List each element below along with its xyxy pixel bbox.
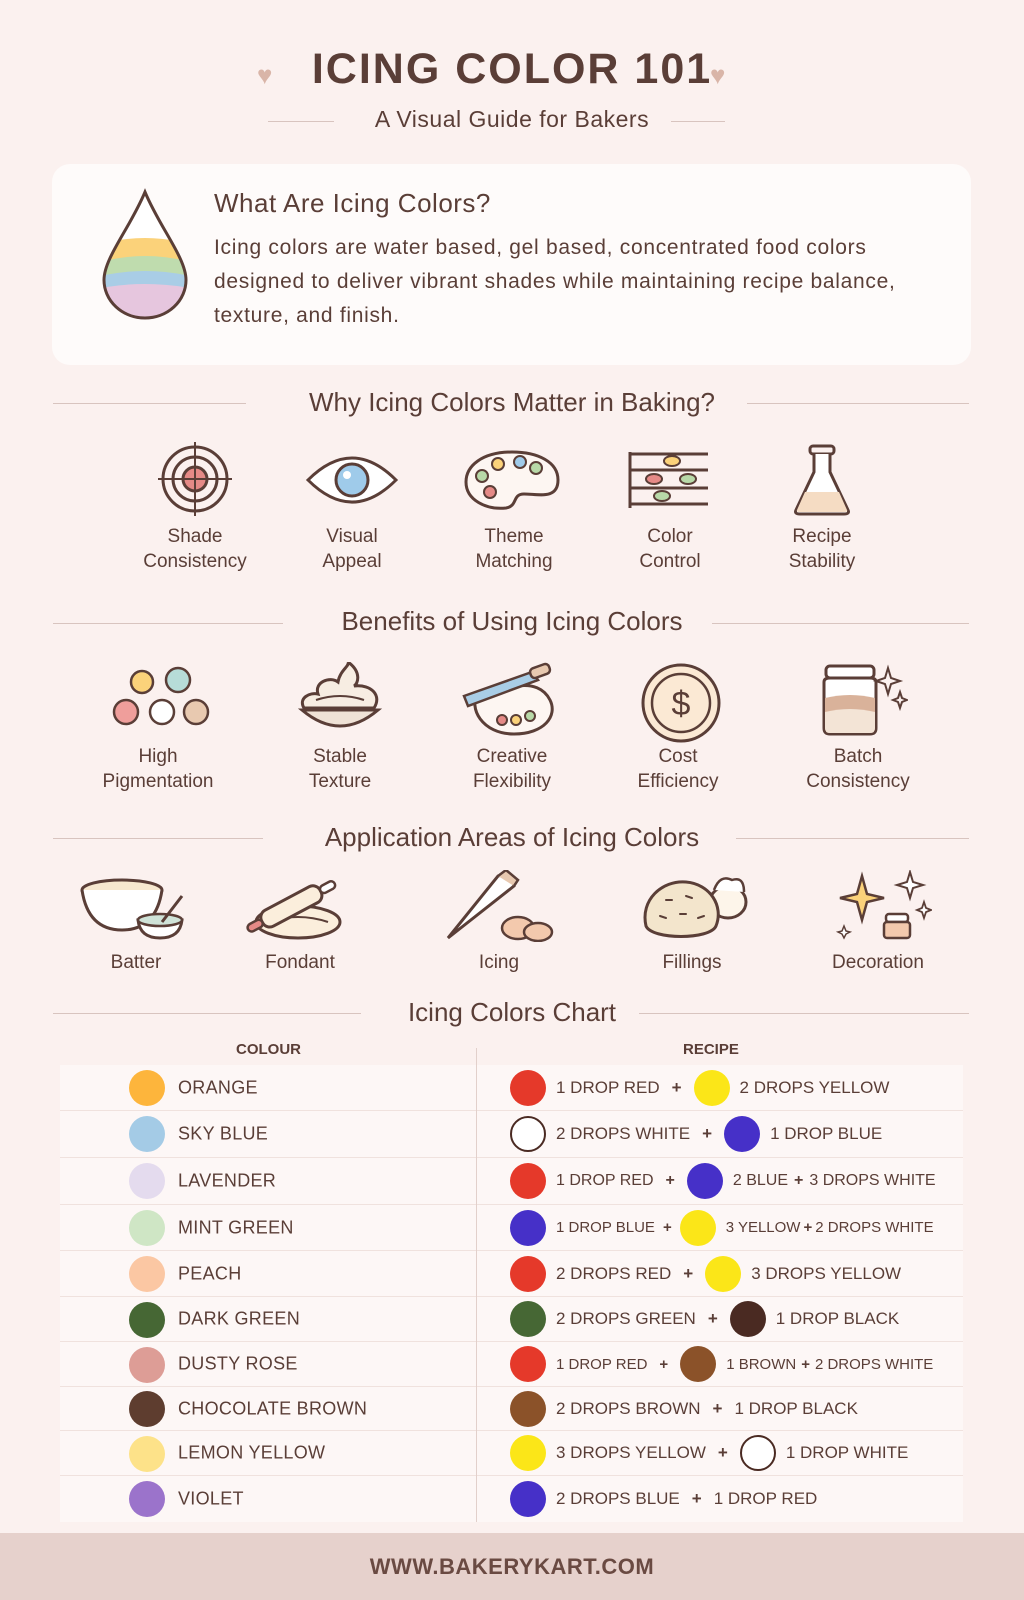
row: mint green bbox=[60, 1205, 963, 1251]
row: chocolate brown: CHOCOLATE BROWN bbox=[178, 1398, 367, 1418]
row: chocolate brown bbox=[60, 1387, 963, 1431]
row: dusty rose: 1 DROP RED 1 BROWN 2 DROPS WHITE bbox=[556, 1356, 933, 1372]
icon: palette bbox=[464, 450, 560, 510]
label: decoration: Decoration bbox=[832, 952, 924, 973]
icon: eye bbox=[306, 456, 398, 504]
label: theme matching bbox=[475, 526, 553, 572]
label: recipe stability: Recipe bbox=[792, 526, 852, 547]
label: visual appeal: Appeal bbox=[322, 551, 382, 572]
icon: coin: $ bbox=[672, 685, 691, 723]
icon: decoration stars bbox=[836, 870, 932, 940]
text block: designed to deliver vibrant shades while maintaining recipe balance, bbox=[214, 270, 896, 293]
row: peach bbox=[60, 1251, 963, 1297]
label: batch consistency: Consistency bbox=[806, 771, 910, 792]
row: dark green: 2 DROPS GREEN 1 DROP BLACK bbox=[556, 1309, 899, 1328]
footer: WWW.BAKERYKART.COM bbox=[370, 1554, 654, 1579]
row: sky blue: SKY BLUE bbox=[178, 1124, 268, 1144]
label: color control: Control bbox=[639, 551, 701, 572]
row: violet: VIOLET bbox=[178, 1488, 244, 1508]
icon: rainbow drop bbox=[102, 188, 188, 320]
label: icing: Icing bbox=[479, 952, 519, 973]
row: mint green: + bbox=[663, 1219, 672, 1236]
label: theme matching: Matching bbox=[475, 551, 553, 572]
label: stable texture bbox=[309, 746, 371, 792]
label: color control bbox=[639, 526, 701, 572]
row: sky blue: 2 DROPS WHITE 1 DROP BLUE bbox=[556, 1124, 882, 1143]
row: chocolate brown: + bbox=[713, 1398, 722, 1418]
row: mint green: + bbox=[803, 1219, 812, 1236]
label: batter: Batter bbox=[111, 952, 161, 973]
icon: flask bbox=[794, 444, 850, 516]
label: shade consistency: Consistency bbox=[143, 551, 247, 572]
label: shade consistency: Shade bbox=[168, 526, 222, 547]
icon: cream bowl bbox=[298, 662, 382, 728]
label: high pigmentation: High bbox=[138, 746, 178, 767]
title: ICING COLOR 101 bbox=[312, 45, 712, 93]
row: lavender: + bbox=[794, 1172, 803, 1189]
label: creative flexibility: Creative bbox=[477, 746, 547, 767]
label: visual appeal bbox=[322, 526, 382, 572]
row: orange: + bbox=[672, 1078, 682, 1096]
label: stable texture: Stable bbox=[313, 746, 367, 767]
row: orange bbox=[60, 1065, 963, 1111]
label: color control: Color bbox=[647, 526, 693, 547]
label: stable texture: Texture bbox=[309, 771, 371, 792]
text block: Icing colors are water based, gel based, concentrated food colors bbox=[214, 236, 867, 259]
row: lemon yellow: LEMON YELLOW bbox=[178, 1442, 325, 1462]
icon: batter bowl bbox=[80, 878, 184, 940]
row: chocolate brown: 2 DROPS BROWN 1 DROP BLACK bbox=[556, 1398, 858, 1418]
header: colour: COLOUR bbox=[236, 1041, 301, 1058]
heading: chart: Icing Colors Chart bbox=[408, 997, 616, 1027]
label: theme matching: Theme bbox=[484, 526, 544, 547]
label: fondant: Fondant bbox=[265, 952, 335, 973]
row: lavender bbox=[60, 1158, 963, 1205]
row: lemon yellow: 3 DROPS YELLOW 1 DROP WHITE bbox=[556, 1443, 908, 1462]
row: lavender: + bbox=[666, 1172, 675, 1189]
icon: coin bbox=[642, 664, 720, 742]
row: dusty rose: + bbox=[659, 1356, 668, 1372]
header: recipe: RECIPE bbox=[683, 1041, 739, 1058]
icon: fondant rolling pin bbox=[246, 880, 342, 940]
label: shade consistency bbox=[143, 526, 247, 572]
row: dark green: + bbox=[708, 1309, 718, 1328]
text block: texture, and finish. bbox=[214, 304, 400, 327]
row: violet: + bbox=[692, 1489, 702, 1508]
row: sky blue: + bbox=[702, 1124, 712, 1143]
heading: application: Application Areas of Icing Colors bbox=[325, 822, 699, 852]
icon: heart left: ♥ bbox=[257, 60, 272, 90]
text block bbox=[214, 236, 896, 327]
label: cost efficiency: Efficiency bbox=[638, 771, 718, 792]
heading: What Are Icing Colors? bbox=[214, 188, 491, 218]
label: recipe stability: Stability bbox=[789, 551, 855, 572]
row: violet: 2 DROPS BLUE 1 DROP RED bbox=[556, 1489, 817, 1508]
icon: heart right: ♥ bbox=[710, 60, 725, 90]
footer bbox=[0, 1533, 1024, 1600]
label: cost efficiency bbox=[638, 746, 718, 792]
row: lemon yellow bbox=[60, 1431, 963, 1476]
row: peach: + bbox=[683, 1264, 693, 1282]
panel: what are icing colors bbox=[52, 164, 971, 365]
label: batch consistency: Batch bbox=[834, 746, 882, 767]
row: mint green: 1 DROP BLUE 3 YELLOW 2 DROPS WHITE bbox=[556, 1219, 934, 1236]
icon: target bbox=[158, 442, 232, 516]
row: lavender: 1 DROP RED 2 BLUE 3 DROPS WHITE bbox=[556, 1172, 936, 1189]
label: visual appeal: Visual bbox=[326, 526, 378, 547]
row: dusty rose bbox=[60, 1342, 963, 1387]
heading: why: Why Icing Colors Matter in Baking? bbox=[309, 387, 715, 417]
icon: piping bag bbox=[446, 870, 554, 942]
table: icing colors chart bbox=[60, 1041, 963, 1522]
row: orange: 1 DROP RED 2 DROPS YELLOW bbox=[556, 1078, 889, 1096]
label: fillings: Fillings bbox=[662, 952, 722, 973]
row: peach: 2 DROPS RED 3 DROPS YELLOW bbox=[556, 1264, 901, 1282]
row: mint green: MINT GREEN bbox=[178, 1217, 294, 1237]
row: dark green: DARK GREEN bbox=[178, 1308, 300, 1328]
row: dusty rose: + bbox=[801, 1356, 810, 1372]
row: lemon yellow: + bbox=[718, 1443, 728, 1462]
row: lavender: LAVENDER bbox=[178, 1170, 276, 1190]
subtitle: A Visual Guide for Bakers bbox=[375, 106, 649, 132]
icon: sliders bbox=[628, 452, 708, 508]
heading: benefits: Benefits of Using Icing Colors bbox=[341, 606, 683, 636]
row: violet bbox=[60, 1476, 963, 1522]
row: dusty rose: DUSTY ROSE bbox=[178, 1354, 298, 1374]
icon: jar sparkle bbox=[822, 664, 908, 736]
row: sky blue bbox=[60, 1111, 963, 1158]
label: batch consistency bbox=[806, 746, 910, 792]
label: high pigmentation: Pigmentation bbox=[103, 771, 213, 792]
icon: palette knife bbox=[462, 662, 554, 736]
label: creative flexibility: Flexibility bbox=[473, 771, 551, 792]
label: recipe stability bbox=[789, 526, 856, 572]
icon: pigment dots bbox=[112, 666, 210, 726]
icon: fillings bbox=[644, 877, 748, 938]
label: creative flexibility bbox=[473, 746, 551, 792]
label: high pigmentation bbox=[103, 746, 213, 792]
row: peach: PEACH bbox=[178, 1263, 242, 1283]
row: orange: ORANGE bbox=[178, 1077, 258, 1097]
label: cost efficiency: Cost bbox=[658, 746, 698, 767]
row: dark green bbox=[60, 1297, 963, 1342]
